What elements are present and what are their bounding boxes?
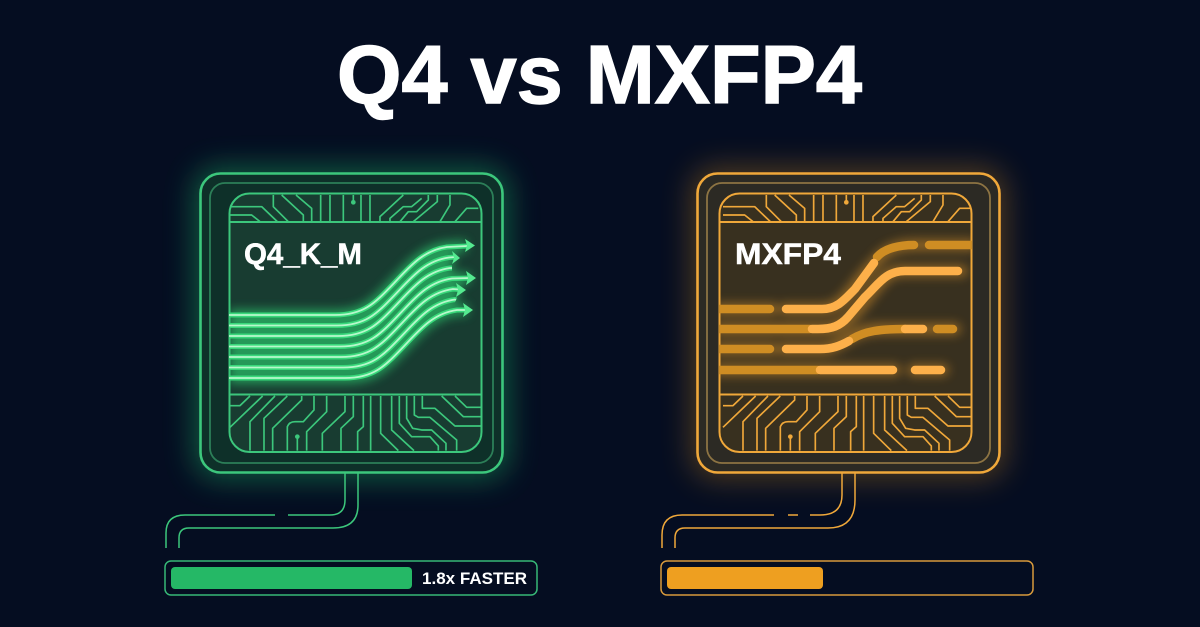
connector wires bbox=[166, 473, 358, 548]
title: Q4 vs MXFP4 bbox=[337, 28, 862, 121]
label: Q4_K_M: Q4_K_M bbox=[244, 238, 362, 271]
speed bar track bbox=[661, 561, 1033, 595]
chip body bbox=[698, 174, 1000, 472]
circuit traces top bbox=[723, 195, 971, 222]
panel: Q4_K_M chip bbox=[165, 167, 537, 595]
label: MXFP4: MXFP4 bbox=[735, 238, 841, 271]
chip middle ring bbox=[210, 183, 493, 463]
data streams bbox=[229, 246, 470, 378]
chip glow bbox=[691, 167, 1006, 479]
chip middle ring bbox=[707, 183, 990, 463]
panel: MXFP4 chip bbox=[661, 167, 1033, 595]
circuit traces top bbox=[230, 195, 478, 222]
circuit traces bottom bbox=[723, 396, 975, 451]
speed bar track bbox=[165, 561, 537, 595]
speed bar fill bbox=[667, 567, 823, 589]
stream arrowheads bbox=[452, 239, 476, 317]
circuit traces bottom bbox=[230, 396, 482, 451]
chip body bbox=[200, 174, 502, 472]
speed bar fill bbox=[171, 567, 412, 589]
chip glow bbox=[194, 167, 509, 479]
chip inner die bbox=[720, 194, 972, 452]
chip inner die bbox=[230, 194, 482, 452]
header and footer dividers bbox=[719, 222, 972, 394]
header and footer dividers bbox=[229, 222, 482, 394]
dim stream segments bbox=[712, 245, 980, 370]
connector wires bbox=[662, 473, 855, 548]
speed label: 1.8x FASTER bbox=[422, 569, 527, 588]
bright stream segments bbox=[786, 263, 958, 370]
stream glow bbox=[719, 245, 971, 370]
